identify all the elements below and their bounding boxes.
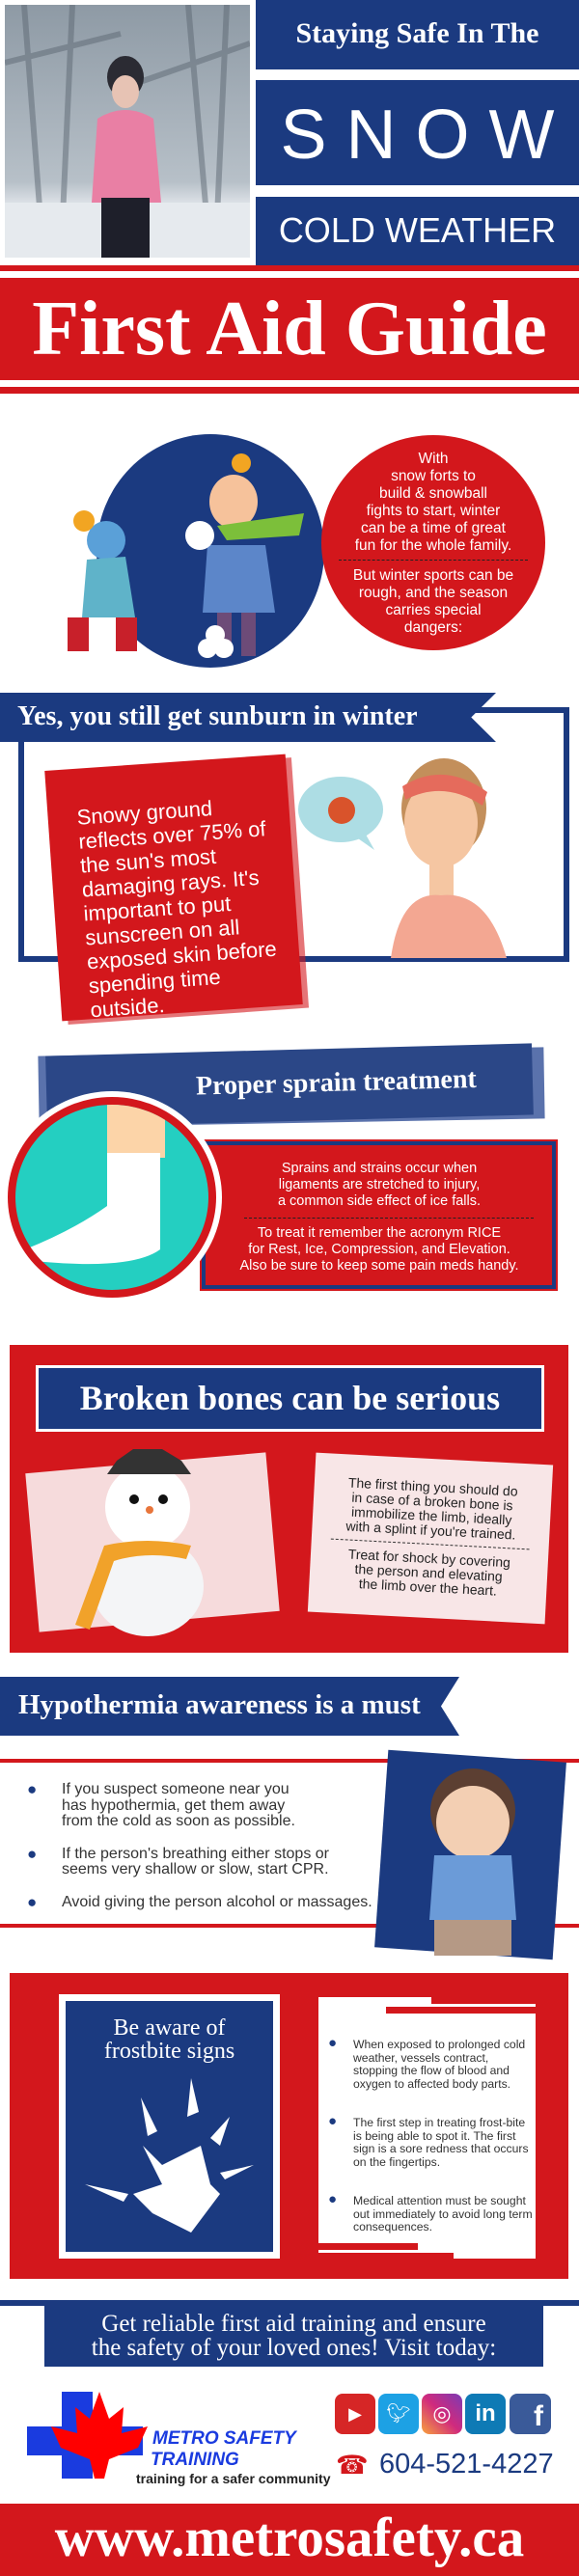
list: hypothermia tips: Avoid giving the person alcohol or massages.	[62, 1894, 372, 1910]
callout: CTA banner	[0, 2300, 579, 2367]
text block: sprain red box: Sprains and strains occur when	[282, 1161, 477, 1176]
text: phone number: 604-521-4227	[379, 2449, 554, 2480]
callout: intro red circle: But winter sports can be	[353, 567, 513, 584]
title: first aid guide	[0, 265, 579, 394]
panel: sprain treatment	[8, 1043, 558, 1298]
icon: bandaged ankle	[8, 1097, 216, 1298]
panel: sunburn	[0, 693, 569, 1025]
logo: metro safety training: training for a safer community	[136, 2471, 330, 2486]
text block: frostbite tips: ●	[328, 2035, 337, 2051]
text block: sprain red box: Also be sure to keep some pain meds handy.	[239, 1258, 519, 1274]
text block: broken bones note: in case of a broken bone is	[351, 1490, 513, 1513]
text block: frostbite tips: ●	[328, 2191, 337, 2207]
text block: broken bones note: Treat for shock by covering	[347, 1547, 510, 1570]
callout: intro red circle: fights to start, winter	[367, 503, 500, 519]
footer: website url	[0, 2504, 579, 2576]
text: phone number: ☎	[336, 2451, 369, 2480]
heading: broken bones	[36, 1365, 544, 1432]
text block: frostbite tips: The first step in treating frost-bite is being able to spot it. The first sign is a sore redness that occurs on the fingertips.	[353, 2116, 529, 2169]
text block: broken bones note: the limb over the heart.	[358, 1576, 497, 1599]
illustration: woman	[391, 758, 507, 958]
text block: sprain red box: for Rest, Ice, Compression, and Elevation.	[248, 1242, 510, 1257]
heading banner: sunburn: Yes, you still get sunburn in winter	[17, 701, 418, 731]
heading: snow: SNOW	[280, 96, 573, 174]
text block: sprain red box	[202, 1141, 556, 1289]
text block: sprain red box: To treat it remember the acronym RICE	[258, 1225, 501, 1241]
list: hypothermia tips	[27, 1780, 372, 1911]
illustration: cold man	[374, 1750, 566, 1960]
panel: hypothermia list	[0, 1750, 579, 1960]
photo: girl in snow	[5, 5, 250, 258]
icon: sun thought bubble	[298, 777, 383, 850]
text block: frostbite tips	[317, 1995, 538, 2261]
text block: frostbite tips: Medical attention must be sought out immediately to avoid long term consequences.	[353, 2194, 533, 2233]
icons: social media: ▶	[348, 2404, 362, 2424]
panel: broken bones	[10, 1345, 568, 1653]
list: hypothermia tips: ●	[27, 1893, 37, 1911]
heading banner: hypothermia: Hypothermia awareness is a must	[18, 1689, 421, 1720]
text block: broken bones note: the person and elevating	[354, 1561, 503, 1584]
heading: staying safe in the: Staying Safe In The	[295, 17, 538, 49]
callout: intro red circle: can be a time of great	[361, 520, 506, 536]
icon: shattered hand	[85, 2078, 254, 2233]
intro illustration: snowball fight	[68, 434, 324, 668]
heading banner: sunburn	[0, 693, 496, 742]
icons: social media: in	[475, 2400, 496, 2426]
text block: frostbite tips: ●	[328, 2113, 337, 2129]
text block: sprain red box: a common side effect of ice falls.	[278, 1193, 481, 1209]
list: hypothermia tips: has hypothermia, get them away	[62, 1797, 285, 1814]
list: hypothermia tips: If the person's breathing either stops or	[62, 1846, 329, 1862]
logo: metro safety training: TRAINING	[151, 2450, 239, 2470]
text block: broken bones note	[308, 1453, 553, 1624]
callout: intro red circle: snow forts to	[391, 468, 476, 484]
panel: frostbite	[10, 1973, 568, 2279]
text block: frostbite tips: When exposed to prolonged cold weather, vessels contract, stopping the flow of blood and oxygen to affected body parts.	[353, 2038, 525, 2090]
list: hypothermia tips: If you suspect someone near you	[62, 1781, 290, 1797]
card: frostbite title and hand	[59, 1994, 280, 2259]
icons: social media: f	[534, 2400, 543, 2432]
text block: sunburn red note	[44, 754, 303, 1021]
callout: intro red circle	[321, 435, 545, 650]
list: hypothermia tips: ●	[27, 1845, 37, 1863]
footer: website url: www.metrosafety.ca	[55, 2507, 524, 2568]
icons: social media: ◎	[432, 2401, 452, 2425]
text block: broken bones note: The first thing you should do	[348, 1474, 518, 1499]
panel: sprain treatment: Proper sprain treatment	[196, 1064, 477, 1102]
callout: intro red circle: dangers:	[404, 619, 462, 636]
title block: staying safe in the snow cold weather	[256, 0, 579, 265]
logo: metro safety training	[27, 2392, 330, 2486]
logo: metro safety training: METRO SAFETY	[152, 2428, 296, 2449]
text block: broken bones note: with a splint if you're trained.	[345, 1518, 516, 1543]
callout: intro red circle: carries special	[385, 602, 482, 618]
text block: broken bones note: immobilize the limb, ideally	[351, 1504, 512, 1527]
list: hypothermia tips: seems very shallow or slow, start CPR.	[62, 1861, 329, 1877]
icons: social media	[335, 2394, 551, 2434]
heading banner: sprain	[38, 1047, 545, 1128]
callout: intro red circle: fun for the whole family.	[355, 537, 511, 554]
callout: intro red circle: With	[419, 451, 448, 467]
title: first aid guide: First Aid Guide	[32, 287, 547, 371]
text block: sunburn red note: Snowy ground reflects over 75% of the sun's most damaging rays. It's important to put sunscreen on all exposed skin before spending time outside.	[76, 796, 277, 1022]
callout: intro red circle: build & snowball	[379, 485, 487, 502]
heading banner: hypothermia	[0, 1677, 459, 1736]
card: frostbite title and hand: Be aware of	[114, 2015, 225, 2041]
card: frostbite title and hand: frostbite signs	[104, 2039, 234, 2064]
icons: social media: 🐦︎	[386, 2403, 411, 2425]
callout: intro red circle: rough, and the season	[359, 585, 508, 601]
heading: cold weather: COLD WEATHER	[279, 210, 556, 250]
heading: broken bones: Broken bones can be serious	[80, 1379, 500, 1417]
list: hypothermia tips: ●	[27, 1780, 37, 1798]
callout: CTA banner: the safety of your loved ones! Visit today:	[92, 2335, 496, 2361]
list: hypothermia tips: from the cold as soon as possible.	[62, 1813, 295, 1829]
callout: CTA banner: Get reliable first aid training and ensure	[101, 2311, 486, 2337]
text block: sprain red box: ligaments are stretched to injury,	[279, 1177, 480, 1192]
illustration: snowman	[25, 1449, 280, 1636]
